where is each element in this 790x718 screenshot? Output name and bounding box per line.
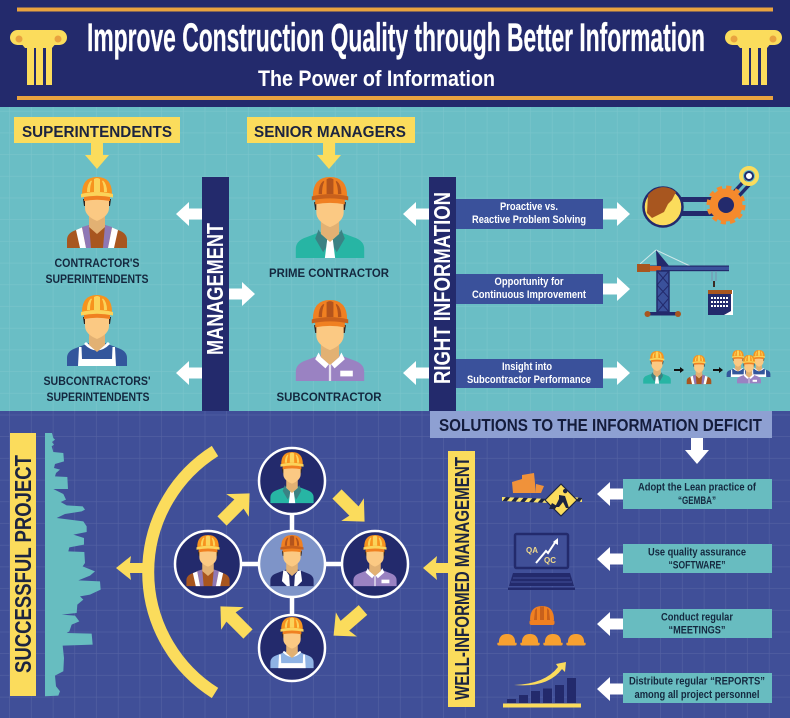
arrow: solutions down (685, 438, 709, 464)
circle: subcontractor's superintendent (259, 615, 325, 681)
circle: prime contractor (259, 448, 325, 514)
icon: gemba (502, 473, 582, 516)
connectors (240, 512, 344, 616)
right information bar: RIGHT INFORMATION (429, 192, 455, 384)
box: gemba: Adopt the Lean practice of (638, 482, 756, 494)
box: software (623, 544, 772, 573)
circle: manager (259, 531, 325, 597)
icon: laptop: QA (526, 546, 538, 555)
box: subcontractor performance (456, 359, 603, 388)
person: subcontractor (276, 300, 382, 404)
well-informed management label: WELL-INFORMED MANAGEMENT (452, 457, 474, 700)
box: subcontractor performance: Insight into (502, 361, 552, 373)
histogram silhouette (45, 433, 101, 696)
box: reports: Distribute regular “REPORTS” (629, 676, 765, 688)
box: reports (623, 673, 772, 703)
person: prime contractor (269, 177, 389, 280)
person: subcontractors' superintendents (44, 295, 151, 404)
icon: laptop (508, 534, 575, 590)
subtitle: The Power of Information (258, 66, 495, 91)
icon: laptop: QC (544, 556, 556, 565)
box: continuous improvement: Opportunity for (494, 276, 564, 288)
icon: left column (10, 30, 67, 85)
box: meetings (623, 609, 772, 638)
arrows: right information left side (403, 202, 429, 385)
person: subcontractor: SUBCONTRACTOR (276, 390, 382, 404)
icon: crane and calendar (637, 250, 733, 317)
label: senior managers (247, 117, 415, 169)
yellow arc (148, 451, 215, 693)
cycle arrows (209, 482, 376, 648)
arrows: right boxes (603, 202, 630, 385)
blue background panel (0, 411, 790, 718)
circle: subcontractor (342, 531, 408, 597)
box: proactive vs reactive: Proactive vs. (500, 201, 558, 213)
label: superintendents (14, 117, 180, 169)
box: gemba (623, 479, 772, 509)
teal background panel (0, 107, 790, 411)
arrows: solutions to icons (597, 482, 623, 701)
icon: gears (644, 168, 757, 226)
icon: meeting helmets (497, 606, 586, 646)
icon: people progression (643, 350, 770, 384)
box: continuous improvement: Continuous Improvement (472, 289, 586, 301)
box: reports: among all project personnel (634, 689, 760, 701)
management bar: MANAGEMENT (202, 223, 228, 355)
header banner (0, 0, 790, 107)
box: software: “SOFTWARE” (668, 560, 726, 572)
icon: reports chart (503, 662, 581, 708)
box: proactive vs reactive: Reactive Problem Solving (472, 214, 586, 226)
person: contractor's superintendents (46, 177, 149, 286)
successful project label: SUCCESSFUL PROJECT (10, 455, 36, 673)
arrows: management (176, 202, 255, 385)
box: meetings: Conduct regular (661, 612, 734, 624)
box: gemba: “GEMBA” (678, 495, 716, 507)
box: software: Use quality assurance (648, 546, 746, 558)
person: prime contractor: PRIME CONTRACTOR (269, 266, 389, 280)
label: senior managers: SENIOR MANAGERS (254, 124, 406, 141)
person: subcontractors' superintendents: SUBCONTRACTORS' (44, 376, 151, 388)
box: continuous improvement (456, 274, 603, 304)
person: contractor's superintendents: SUPERINTENDENTS (46, 274, 149, 286)
box: meetings: “MEETINGS” (668, 624, 726, 636)
solutions heading (430, 411, 772, 438)
management bar (202, 177, 229, 411)
circle: contractor's superintendent (175, 531, 241, 597)
box: subcontractor performance: Subcontractor Performance (467, 374, 591, 386)
well-informed management label (448, 451, 475, 707)
arrow: arc to project (116, 556, 144, 580)
icon: right column (725, 30, 782, 85)
box: proactive vs reactive (456, 199, 603, 229)
person: contractor's superintendents: CONTRACTOR'S (54, 258, 140, 270)
person: subcontractors' superintendents: SUPERINTENDENTS (46, 392, 150, 404)
arrow: management to cycle (423, 556, 448, 580)
label: superintendents: SUPERINTENDENTS (22, 124, 172, 141)
